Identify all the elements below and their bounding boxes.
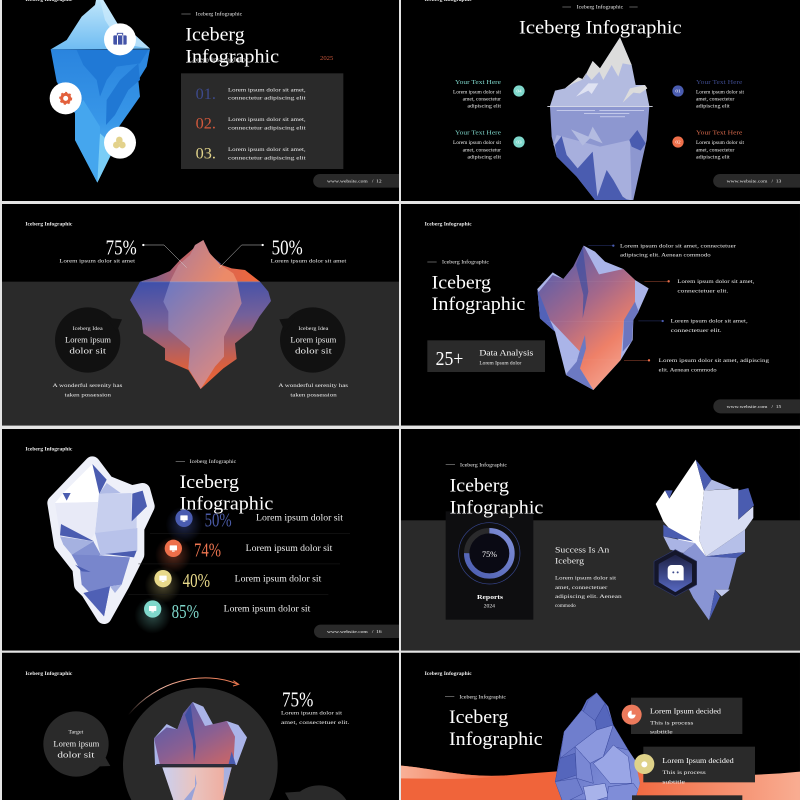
right caption: A wonderful serenity has [278, 382, 348, 389]
left speech bubble: dolor sit [69, 346, 107, 355]
left speech bubble [55, 307, 122, 373]
right speech bubble: dolor sit [295, 346, 333, 355]
title: Infographic [450, 497, 543, 518]
header label: Iceberg Infographic [442, 261, 489, 266]
label 02: amet, consectetur [696, 148, 735, 153]
row 85% [134, 597, 311, 634]
stat box: 25+ [436, 348, 463, 370]
process step 2: Lorem Ipsum decided [662, 756, 734, 765]
header label [562, 6, 638, 11]
item 01: 01. [196, 86, 216, 103]
item 01: connectetur adipiscing elit [228, 96, 306, 102]
running header: Iceberg Infographic [25, 447, 73, 452]
row 85%: 85% [172, 601, 199, 623]
icon: three circles [104, 127, 136, 159]
label 01: Your Text Here [696, 79, 743, 86]
label 04: adipiscing elit [467, 105, 502, 110]
footer pill [313, 174, 399, 188]
footer pill: www.website.com / 16 [327, 629, 383, 634]
note 1: adipiscing elit. Aenean commodo [620, 253, 711, 259]
text block: Lorem ipsum dolor sit [555, 576, 617, 582]
icon: gear [50, 82, 82, 114]
left speech bubble: Target [68, 730, 84, 735]
row 40%: 40% [183, 570, 210, 592]
right speech bubble: Lorem ipsum [290, 335, 337, 344]
label 02: adipiscing elit [696, 156, 730, 161]
curved arrow [128, 678, 239, 715]
gradient iceberg [154, 702, 247, 800]
panel: slide 14, split iceberg [2, 204, 399, 426]
process step 2 [634, 747, 755, 785]
header label [427, 261, 489, 266]
stat box: Lorem Ipsum dolor [479, 361, 522, 366]
low-poly iceberg with halo [55, 464, 147, 616]
label 03: adipiscing elit [467, 156, 502, 161]
icon: briefcase [104, 23, 136, 55]
stat box: Data Analysis [479, 348, 533, 357]
big circle [123, 688, 278, 800]
header label: Iceberg Infographic [459, 695, 506, 700]
text block: Success Is An [555, 545, 609, 554]
item 02: Lorem ipsum dolor sit amet, [228, 117, 306, 123]
item 03: connectetur adipiscing elit [228, 155, 306, 161]
right caption: taken possession [290, 392, 337, 398]
year: 2025 [320, 56, 333, 62]
header label [446, 463, 507, 468]
process step 1: This is process [650, 720, 693, 726]
row 50% [150, 506, 350, 543]
note 2 [644, 279, 755, 294]
header label: Iceberg Infographic [196, 13, 242, 18]
text block [555, 545, 622, 609]
header label: Iceberg Infographic [460, 463, 507, 468]
process step 2: This is process [662, 770, 706, 776]
note 4: Lorem ipsum dolor sit amet, adipiscing [659, 358, 769, 364]
note 1 [588, 243, 736, 259]
title: Iceberg [432, 272, 491, 293]
stat box [427, 340, 545, 372]
title [450, 475, 543, 518]
item 03: Lorem ipsum dolor sit amet, [228, 147, 306, 153]
report card [446, 511, 533, 620]
label 02 [672, 130, 745, 161]
footer pill [713, 399, 800, 413]
header label [176, 460, 236, 465]
callout 75%: Lorem ipsum dolor sit amet [59, 259, 136, 265]
label 01 [672, 79, 745, 110]
left caption: taken possession [65, 392, 111, 398]
label 01: amet, consectetur [696, 98, 735, 103]
title: Infographic [449, 729, 543, 750]
label 04: Lorem ipsum dolor sit [453, 90, 502, 95]
left speech bubble: Lorem ipsum [53, 739, 100, 748]
callout 50%: Lorem ipsum dolor sit amet [271, 259, 347, 265]
label 02: Lorem ipsum dolor sit [696, 141, 745, 146]
label 03: 03 [516, 140, 522, 145]
report card: Reports [477, 594, 503, 601]
footer pill: www.website.com / 13 [727, 178, 781, 183]
footer pill: www.website.com / 15 [727, 404, 781, 409]
text block: Iceberg [555, 556, 584, 565]
item 03 [196, 148, 306, 160]
right caption [278, 383, 348, 398]
note 4: elit. Aenean commodo [659, 367, 717, 373]
blue iceberg illustration [51, 0, 150, 183]
note 3: connectetuer elit. [671, 328, 722, 334]
note 3 [638, 319, 748, 334]
row 40% [128, 567, 328, 603]
iceberg illustration [547, 37, 653, 200]
row 74%: 74% [194, 540, 221, 562]
low-poly iceberg [555, 693, 640, 800]
title: Iceberg Infographic [519, 17, 682, 38]
panel: slide 16, percentage rows [2, 429, 399, 651]
footer pill: www.website.com / 12 [327, 178, 382, 183]
left speech bubble: Lorem ipsum [65, 335, 112, 344]
running header: Iceberg Infographic [25, 672, 73, 677]
row 40%: Lorem ipsum dolor sit [235, 573, 322, 583]
callout 50% [219, 237, 347, 268]
title: Infographic [180, 494, 273, 515]
label 04: amet, consectetur [463, 98, 501, 103]
right speech bubble: Iceberg Idea [298, 327, 328, 332]
callout 50%: 50% [272, 237, 303, 259]
list panel [181, 73, 343, 169]
hexagon chat badge [654, 550, 697, 596]
stat 75%: Lorem ipsum dolor sit [281, 711, 343, 717]
running header: Iceberg Infographic [425, 672, 473, 677]
title: Iceberg [449, 707, 508, 728]
gradient iceberg [130, 240, 271, 389]
note 3: Lorem ipsum dolor sit amet, [671, 319, 748, 325]
panel: slide 17, reports ring [401, 429, 800, 651]
row 50%: 50% [205, 509, 232, 531]
footer pill [713, 174, 800, 188]
process step 1: Lorem Ipsum decided [650, 706, 721, 715]
label 03: amet, consectetur [463, 148, 501, 153]
panel: slide 19, low-poly process [401, 653, 800, 800]
label 04: 04 [516, 89, 523, 94]
callout 75% [59, 237, 187, 268]
label 01: Lorem ipsum dolor sit [696, 90, 745, 95]
process step 1 [622, 698, 742, 736]
left caption [52, 383, 122, 398]
stat 75%: amet, consectetuer elit. [281, 720, 349, 726]
label 03: Lorem ipsum dolor sit [453, 141, 502, 146]
note 2: connectetuer elit. [677, 288, 729, 294]
running header: Iceberg Infographic [25, 222, 73, 227]
process step 2: subtitle [662, 779, 686, 785]
left caption: A wonderful serenity has [53, 382, 122, 389]
orange wave [401, 766, 800, 800]
panel: slide 13, four labels [401, 0, 800, 201]
item 02: 02. [196, 116, 216, 133]
running header: Iceberg Infographic [425, 222, 473, 227]
callout 75%: 75% [106, 237, 137, 259]
header label [445, 695, 506, 700]
label 03 [453, 130, 525, 161]
row 74%: Lorem ipsum dolor sit [246, 543, 333, 553]
item 02: connectetur adipiscing elit [228, 125, 306, 131]
process step 1: subtitle [650, 730, 674, 736]
right speech bubble [285, 785, 346, 800]
panel: slide 15, four notes [401, 204, 800, 426]
title [180, 472, 273, 515]
process step 3 [632, 795, 742, 800]
label 03: Your Text Here [455, 130, 501, 137]
title: Iceberg [180, 472, 239, 493]
title: Iceberg [450, 475, 509, 496]
left speech bubble: dolor sit [57, 750, 95, 759]
gradient iceberg [537, 246, 649, 390]
left speech bubble [43, 711, 110, 777]
title: Infographic [185, 46, 279, 67]
text block: amet, connectetuer [555, 585, 608, 591]
panel: slide 12, numbered list [2, 0, 399, 201]
row 74% [138, 536, 340, 573]
subtitle overlapped by title: Lorem ipsum dolor [188, 58, 248, 64]
title: Infographic [432, 294, 525, 315]
title [449, 707, 543, 750]
title [185, 25, 279, 67]
note 2: Lorem ipsum dolor sit amet, [677, 279, 755, 285]
footer pill [314, 625, 399, 638]
report card: 75% [482, 550, 497, 559]
panel: slide 18, target [2, 653, 399, 800]
row 85%: Lorem ipsum dolor sit [224, 604, 311, 614]
report card: 2024 [484, 604, 496, 609]
header label: Iceberg Infographic [577, 6, 623, 11]
header label: Iceberg Infographic [190, 460, 236, 465]
label 02: 02 [675, 140, 681, 145]
stat 75% [281, 690, 349, 726]
note 4 [624, 358, 769, 373]
label 02: Your Text Here [696, 130, 743, 137]
label 04: Your Text Here [455, 79, 501, 86]
item 03: 03. [196, 145, 216, 162]
stat 75%: 75% [282, 690, 313, 712]
title [432, 272, 525, 315]
row 50%: Lorem ipsum dolor sit [256, 512, 344, 522]
left speech bubble: Iceberg Idea [73, 327, 103, 332]
label 04 [453, 79, 525, 110]
item 01: Lorem ipsum dolor sit amet, [228, 87, 306, 93]
item 02 [196, 118, 306, 130]
title: Iceberg [185, 25, 245, 46]
text block: commodo [555, 603, 576, 609]
label 01: adipiscing elit [696, 105, 730, 110]
header label [181, 13, 242, 18]
note 1: Lorem ipsum dolor sit amet, connectetuer [620, 243, 736, 249]
low-poly iceberg [656, 460, 754, 620]
item 01 [196, 88, 306, 100]
label 01: 01 [675, 89, 681, 94]
text block: adipiscing elit. Aenean [555, 594, 622, 600]
right speech bubble [279, 307, 345, 373]
